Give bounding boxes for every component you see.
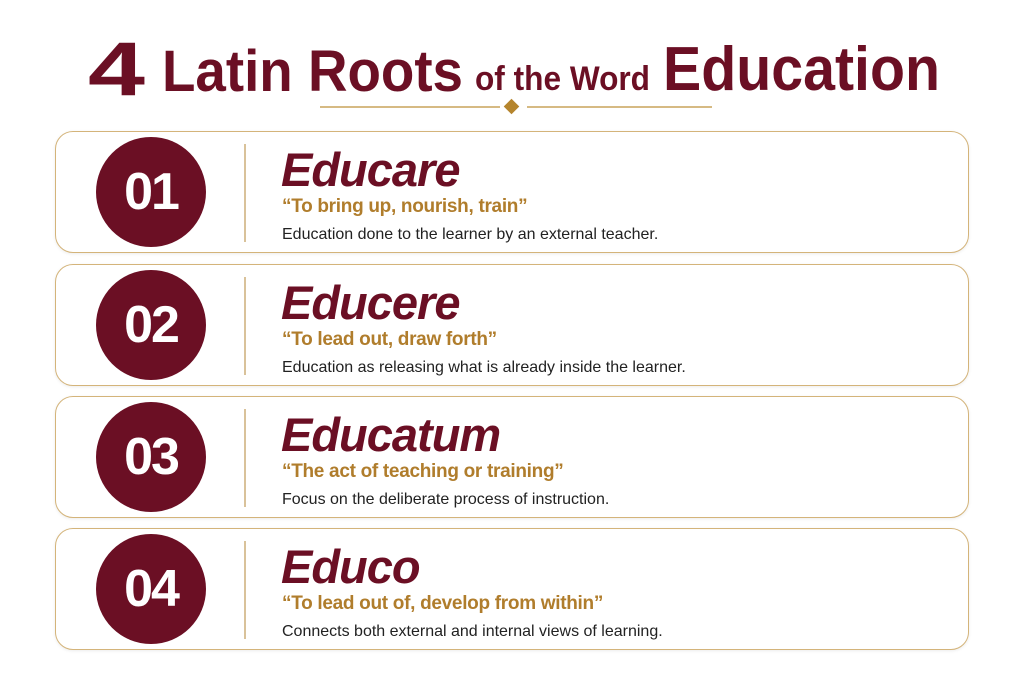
card 4	[55, 528, 969, 650]
title: Education	[663, 35, 940, 104]
name: Educatum	[281, 408, 500, 461]
circle 03	[96, 402, 206, 512]
title: 4	[88, 27, 145, 112]
title: of the Word	[475, 60, 650, 98]
circle 01: 01	[124, 163, 178, 221]
card 3	[55, 396, 969, 518]
description: Education as releasing what is already inside the learner.	[282, 359, 686, 376]
title: Latin Roots	[162, 39, 463, 104]
circle 01	[96, 137, 206, 247]
circle 03: 03	[124, 428, 178, 486]
circle 04	[96, 534, 206, 644]
quote: “To lead out of, develop from within”	[282, 593, 603, 614]
quote: “To bring up, nourish, train”	[282, 196, 527, 217]
name: Educare	[281, 143, 459, 196]
title	[88, 27, 940, 114]
quote: “To lead out, draw forth”	[282, 329, 497, 350]
circle 02	[96, 270, 206, 380]
circle 02: 02	[124, 296, 178, 354]
description: Connects both external and internal views of learning.	[282, 623, 663, 640]
name: Educo	[281, 540, 420, 593]
description: Focus on the deliberate process of instruction.	[282, 491, 609, 508]
quote: “The act of teaching or training”	[282, 461, 563, 482]
name: Educere	[281, 276, 459, 329]
card 2	[55, 264, 969, 386]
description: Education done to the learner by an external teacher.	[282, 226, 658, 243]
circle 04: 04	[124, 560, 178, 618]
card 1	[55, 131, 969, 253]
